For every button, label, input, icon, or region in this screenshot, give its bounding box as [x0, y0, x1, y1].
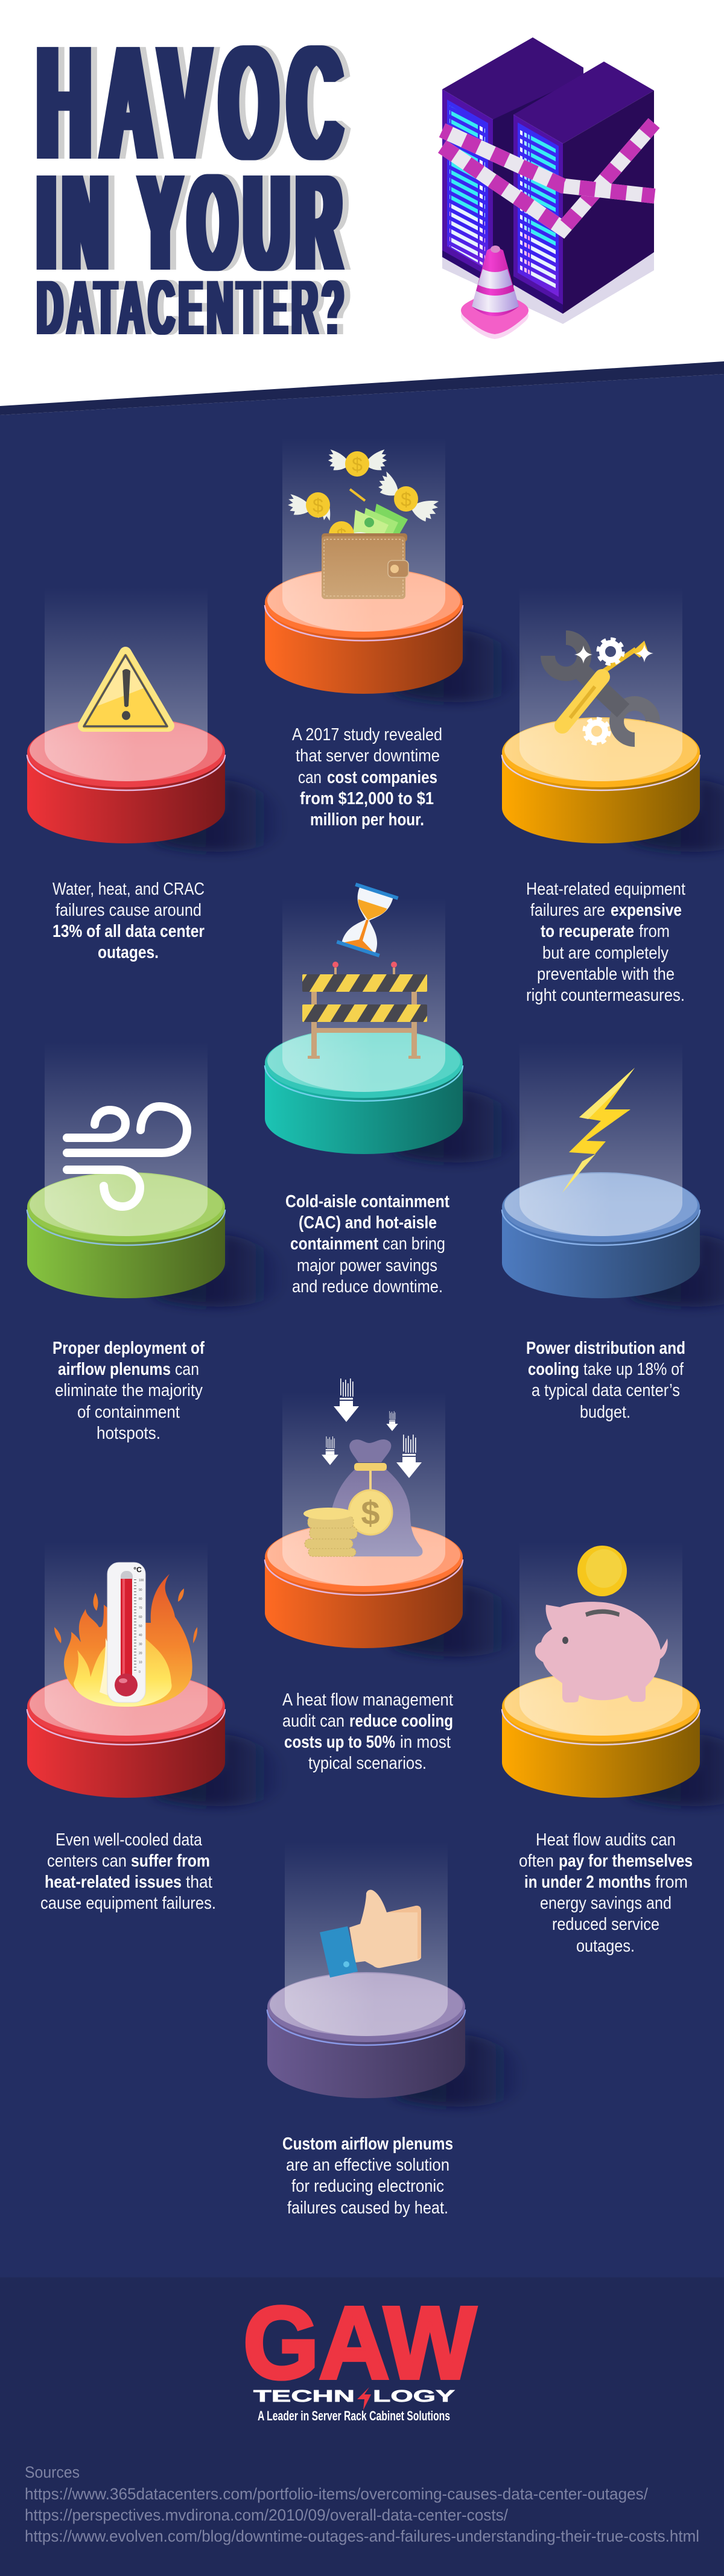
caption: that server downtime — [296, 746, 440, 766]
panel: audit savings — [265, 1378, 523, 1773]
caption — [519, 1830, 693, 1956]
text: HAVOC — [37, 12, 352, 194]
caption — [285, 1192, 449, 1296]
icon: money bag, coins and down arrows — [303, 1378, 422, 1556]
caption: Even well-cooled data — [56, 1830, 203, 1850]
caption: heat-related issues — [45, 1873, 182, 1892]
panel: outages warning — [27, 587, 285, 962]
caption: can — [298, 768, 322, 787]
caption: typical scenarios. — [308, 1754, 427, 1773]
caption: to recuperate — [541, 922, 634, 941]
icon: wind — [67, 1106, 187, 1207]
caption: Power distribution and — [526, 1339, 685, 1358]
icon: fire and thermometer: 0 — [139, 1670, 141, 1674]
icon: thumbs up — [320, 1890, 421, 1978]
caption: and reduce downtime. — [292, 1277, 443, 1296]
panel: heat issues — [27, 1541, 285, 1913]
Technology wordmark: TECHN — [253, 2387, 355, 2405]
caption: cooling — [528, 1360, 579, 1379]
icon: flying coins and wallet: $ — [352, 454, 363, 475]
caption: 13% of all data center — [52, 922, 205, 941]
caption: a typical data center’s — [532, 1381, 680, 1400]
icon: fire and thermometer: 30 — [139, 1643, 142, 1646]
icon: fire and thermometer: 90 — [139, 1588, 142, 1592]
icon: flying coins and wallet: $ — [313, 495, 323, 516]
caption: in most — [400, 1733, 451, 1752]
caption: A heat flow management — [282, 1690, 453, 1710]
caption: suffer from — [131, 1851, 210, 1871]
caption: major power savings — [297, 1256, 437, 1275]
caption: but are completely — [542, 944, 668, 963]
caption: energy savings and — [540, 1894, 672, 1913]
caption: (CAC) and hot-aisle — [299, 1213, 437, 1232]
icon: flying coins and wallet: $ — [337, 525, 347, 545]
panel: tools — [502, 587, 724, 1005]
icon: piggy bank and coin — [535, 1546, 668, 1702]
caption: cost companies — [327, 768, 437, 787]
caption: pay for themselves — [559, 1851, 693, 1871]
caption: failures cause around — [56, 901, 202, 920]
caption: take up 18% of — [583, 1360, 684, 1379]
sources: https://www.evolven.com/blog/downtime-outages-and-failures-understanding-their-true-costs.html — [25, 2527, 699, 2545]
icon: lightning bolt — [562, 1068, 635, 1193]
caption: expensive — [611, 901, 682, 920]
panel: piggy bank — [502, 1541, 724, 1956]
caption — [40, 1830, 216, 1913]
sources: https://perspectives.mvdirona.com/2010/09/overall-data-center-costs/ — [25, 2506, 508, 2524]
caption: Heat-related equipment — [526, 880, 685, 899]
icon: fire and thermometer: 10 — [139, 1661, 142, 1664]
caption: often — [519, 1851, 554, 1871]
sources: https://www.365datacenters.com/portfolio-items/overcoming-causes-data-center-outages/ — [25, 2485, 648, 2503]
yellow pedestal — [502, 587, 724, 852]
icon: fire and thermometer: 80 — [139, 1597, 142, 1601]
caption: right countermeasures. — [526, 986, 685, 1005]
caption: A 2017 study revealed — [292, 725, 442, 744]
icon: fire and thermometer: 60 — [139, 1616, 142, 1619]
tagline: A Leader in Server Rack Cabinet Solutions — [258, 2408, 450, 2423]
panel: power — [502, 1042, 724, 1422]
caption: are an effective solution — [286, 2156, 449, 2175]
caption: failures caused by heat. — [287, 2198, 448, 2218]
sources: Sources — [25, 2463, 80, 2481]
caption — [282, 2134, 453, 2218]
caption: hotspots. — [97, 1424, 160, 1443]
panel: airflow — [27, 1042, 285, 1443]
caption: from — [655, 1873, 688, 1892]
caption: reduced service — [552, 1915, 659, 1934]
caption — [526, 880, 685, 1005]
red pedestal — [27, 1541, 285, 1806]
icon: flying coins and wallet: $ — [401, 489, 411, 510]
caption: Proper deployment of — [52, 1339, 205, 1358]
caption — [52, 1339, 205, 1443]
caption: costs up to 50% — [284, 1733, 395, 1752]
green pedestal — [27, 1042, 285, 1307]
caption: of containment — [77, 1403, 180, 1422]
caption: outages. — [98, 943, 159, 962]
caption: eliminate the majority — [55, 1381, 203, 1400]
caption: for reducing electronic — [291, 2177, 444, 2196]
caption: reduce cooling — [349, 1712, 453, 1731]
GAW wordmark: GAW — [243, 2286, 477, 2400]
text: DATACENTER? — [37, 265, 348, 351]
caption: audit can — [282, 1712, 345, 1731]
red pedestal — [27, 587, 285, 852]
caption: failures are — [530, 901, 605, 920]
icon: money bag, coins and down arrows: $ — [361, 1494, 380, 1532]
icon: fire and thermometer: 100 — [139, 1579, 144, 1582]
caption: Custom airflow plenums — [282, 2134, 453, 2154]
icon: fire and thermometer: 20 — [139, 1652, 142, 1655]
caption: million per hour. — [310, 810, 424, 830]
caption: Water, heat, and CRAC — [52, 880, 205, 899]
caption: in under 2 months — [524, 1873, 651, 1892]
orange pedestal — [265, 1392, 523, 1657]
caption — [282, 1690, 453, 1773]
purple pedestal — [267, 1842, 526, 2107]
logo: GAW Technology — [243, 2286, 477, 2423]
icon: fire and thermometer: 50 — [139, 1625, 142, 1628]
caption: Heat flow audits can — [536, 1830, 676, 1850]
illustration: server racks with tape and cone — [442, 37, 655, 339]
caption: preventable with the — [537, 965, 675, 984]
icon: barricade — [302, 962, 427, 1059]
title — [37, 12, 352, 351]
icon: fire and thermometer: 70 — [139, 1607, 142, 1610]
icon: fire and thermometer: 40 — [139, 1634, 142, 1637]
caption: Cold-aisle containment — [285, 1192, 449, 1211]
caption: from — [639, 922, 670, 941]
panel: containment — [265, 884, 523, 1296]
blue pedestal — [502, 1042, 724, 1307]
panel: custom plenums — [267, 1842, 526, 2218]
caption: airflow plenums — [58, 1360, 171, 1379]
yellow pedestal — [502, 1541, 724, 1806]
caption: can bring — [383, 1234, 445, 1254]
caption: cause equipment failures. — [40, 1894, 216, 1913]
sources — [25, 2463, 699, 2545]
teal pedestal — [265, 898, 523, 1163]
caption — [52, 880, 205, 962]
caption: can — [175, 1360, 199, 1379]
caption: budget. — [580, 1403, 630, 1422]
icon: fire and thermometer — [54, 1562, 197, 1707]
panel: money / wallet — [265, 437, 523, 830]
icon: warning sign — [84, 653, 168, 726]
Technology wordmark — [253, 2387, 456, 2410]
caption: that — [186, 1873, 212, 1892]
icon: flying coins and wallet — [288, 449, 441, 599]
caption: containment — [290, 1234, 378, 1254]
icon: wrench, screwdriver and gears — [548, 638, 653, 743]
caption — [292, 725, 442, 830]
Technology wordmark: LOGY — [373, 2387, 456, 2405]
caption — [526, 1339, 685, 1422]
icon: fire and thermometer: °C — [133, 1566, 142, 1574]
caption: from $12,000 to $1 — [300, 789, 434, 808]
caption: centers can — [47, 1851, 127, 1871]
caption: outages. — [576, 1937, 635, 1956]
orange pedestal — [265, 437, 523, 702]
icon: hourglass — [337, 884, 398, 956]
